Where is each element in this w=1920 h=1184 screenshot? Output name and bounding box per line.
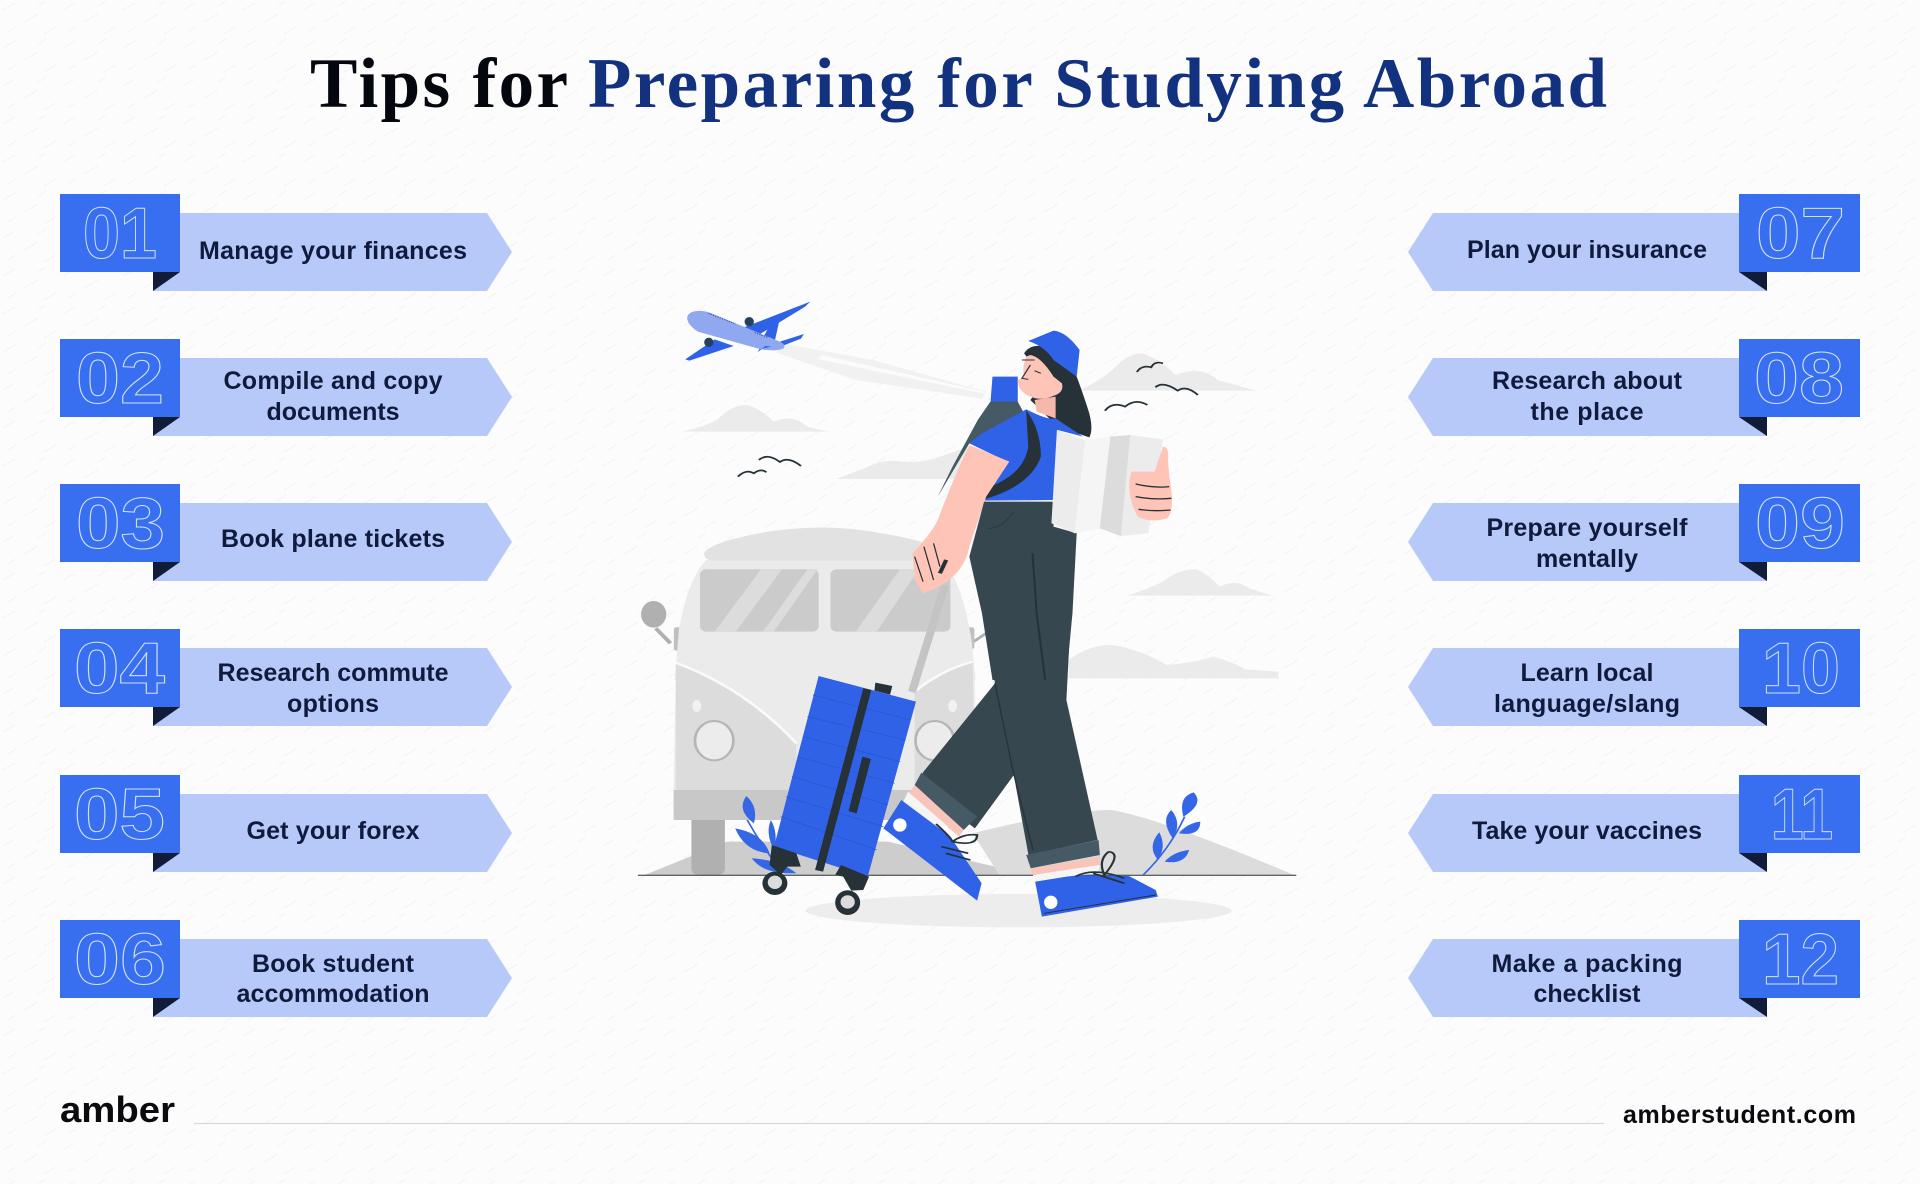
title: Preparing for Studying Abroad xyxy=(588,45,1607,123)
traveller figure xyxy=(883,331,1172,917)
tip 05: Get your forex xyxy=(246,817,420,845)
tip 08: 08 xyxy=(1754,339,1844,419)
ground line and shadow xyxy=(638,875,1296,927)
tip 05: 05 xyxy=(74,775,165,855)
tip 11: 11 xyxy=(1771,775,1833,855)
tip 03 xyxy=(60,484,512,581)
tip 08 xyxy=(1408,339,1860,436)
footer website: amberstudent.com xyxy=(1623,1101,1856,1129)
tip 05 xyxy=(60,775,512,872)
tip 07: Plan your insurance xyxy=(1467,236,1707,264)
tip 02: Compile and copy xyxy=(224,367,443,395)
birds xyxy=(738,363,1198,477)
tip 09: Prepare yourself xyxy=(1486,514,1688,542)
tip 12: 12 xyxy=(1762,920,1839,1000)
tip 01: Manage your finances xyxy=(199,237,467,265)
clouds xyxy=(681,353,1278,678)
tip 06: accommodation xyxy=(236,980,430,1008)
footer logo: amber xyxy=(60,1089,175,1130)
tip 08: the place xyxy=(1530,398,1644,426)
tip 03: 03 xyxy=(76,484,165,564)
airplane and contrail xyxy=(685,302,986,399)
tip 07: 07 xyxy=(1756,194,1845,274)
title: Tips for xyxy=(310,45,568,123)
tip 04: 04 xyxy=(74,629,165,709)
tip 01: 01 xyxy=(83,194,157,274)
tip 06: 06 xyxy=(74,920,166,1000)
tip 02: 02 xyxy=(76,339,164,419)
tip 11: Take your vaccines xyxy=(1472,817,1702,845)
tip 12: Make a packing xyxy=(1492,950,1682,978)
tip 10 xyxy=(1408,629,1860,726)
tip 08: Research about xyxy=(1492,367,1683,395)
tip 02: documents xyxy=(266,398,400,426)
tip 06 xyxy=(60,920,512,1017)
tip 06: Book student xyxy=(252,950,415,978)
tip 07 xyxy=(1408,194,1860,291)
tip 10: 10 xyxy=(1762,629,1840,709)
tip 04: options xyxy=(287,690,379,718)
tip 10: language/slang xyxy=(1494,690,1680,718)
tip 01 xyxy=(60,194,512,291)
suitcase xyxy=(762,585,945,915)
tip 11 xyxy=(1408,775,1860,872)
tip 09: 09 xyxy=(1755,484,1845,564)
blue leaves xyxy=(735,792,1200,875)
tip 03: Book plane tickets xyxy=(221,525,445,553)
tip 09: mentally xyxy=(1536,545,1638,573)
tip 10: Learn local xyxy=(1520,659,1654,687)
tip 12 xyxy=(1408,920,1860,1017)
tip 12: checklist xyxy=(1534,980,1641,1008)
central illustration xyxy=(638,302,1296,927)
tip 02 xyxy=(60,339,512,436)
tip 09 xyxy=(1408,484,1860,581)
tip 04 xyxy=(60,629,512,726)
tip 04: Research commute xyxy=(218,659,449,687)
camper van xyxy=(641,527,1294,875)
